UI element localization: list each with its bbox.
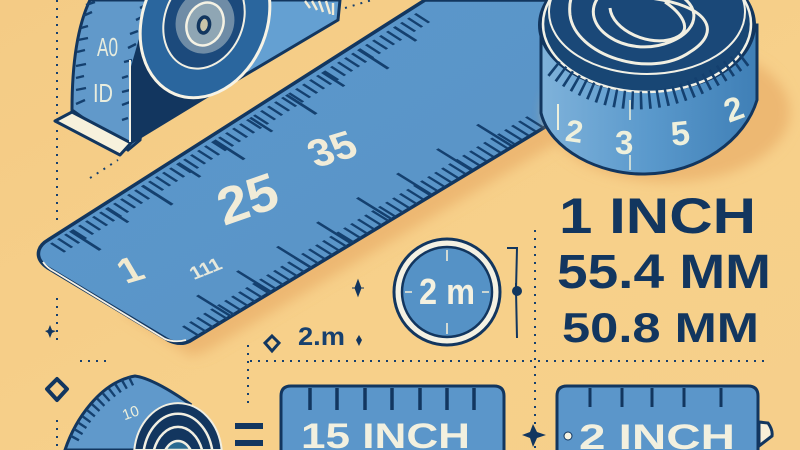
sparkle dot right of label <box>356 335 362 346</box>
bottom roll ring white inner <box>165 441 191 450</box>
right wedge <box>240 0 340 78</box>
strip ticks <box>76 2 148 120</box>
bottom roll strip <box>65 376 190 450</box>
text: 1 inch: 1 INCH <box>559 188 756 244</box>
dial ticks <box>405 250 489 334</box>
roll shadow <box>546 42 790 182</box>
dial face <box>402 247 492 337</box>
wedge ticks <box>305 1 333 15</box>
roll center marks <box>629 100 631 170</box>
bottom roll ring white outer <box>144 414 212 450</box>
roll dark band <box>549 0 745 74</box>
15 inch box <box>281 386 504 450</box>
white foot <box>55 112 131 155</box>
roll top face <box>540 0 754 91</box>
circle dial <box>394 239 500 345</box>
white strip line <box>129 60 131 142</box>
roll number 3: 3 <box>615 124 633 161</box>
box hole <box>564 432 572 440</box>
large diamond icon <box>47 379 67 400</box>
sparkle upper <box>352 280 364 296</box>
ruler body <box>38 0 560 343</box>
ruler number 25: 25 <box>210 162 285 237</box>
ruler number 35: 35 <box>300 122 364 176</box>
ruler upper ticks <box>57 15 435 253</box>
dark housing <box>131 38 210 144</box>
hub ring <box>185 1 225 47</box>
box body <box>557 386 758 450</box>
dial outer ring <box>394 239 500 345</box>
inner disc <box>176 0 234 54</box>
bottom roll rings <box>134 403 222 450</box>
roll number 2: 2 <box>563 113 585 150</box>
roll white rim <box>543 0 751 92</box>
roll number 5: 5 <box>669 114 692 154</box>
roll side <box>541 25 757 174</box>
box ticks <box>310 388 474 410</box>
ruler lower ticks <box>181 115 536 332</box>
2 inch box <box>557 386 772 450</box>
ruler shadow <box>140 128 556 357</box>
small diamond divider <box>522 424 546 447</box>
tape roll top right <box>540 0 790 182</box>
bottom roll ticks <box>74 379 135 439</box>
sparkle left <box>45 325 56 338</box>
label 2.m: 2.m <box>298 323 345 351</box>
tape roll bottom left <box>65 376 222 450</box>
roll number 2 right: 2 <box>719 88 749 129</box>
sparkle near label <box>265 336 279 351</box>
hub hole <box>197 16 211 34</box>
roll ticks <box>553 57 745 100</box>
bottom roll numbers: 10 <box>120 402 142 424</box>
dimension bracket right of dial <box>507 248 517 338</box>
box body <box>281 386 504 450</box>
outer wheel <box>138 0 272 100</box>
spiral rings <box>570 0 707 64</box>
roll numbers <box>557 97 745 170</box>
middle wheel <box>162 0 246 70</box>
tape strip <box>70 0 145 152</box>
ruler <box>38 0 560 343</box>
text: 50.8 mm: 50.8 MM <box>562 304 759 351</box>
ruler highlight edge <box>43 262 186 341</box>
roll mark 1 <box>557 104 559 130</box>
text: 55.4 mm: 55.4 MM <box>557 246 771 299</box>
ruler number 1: 1 <box>109 249 152 292</box>
ruler number 11: 111 <box>186 254 226 284</box>
box ticks <box>590 388 721 407</box>
bottom roll ring white middle <box>154 427 202 450</box>
dial label: 2 m <box>419 271 475 312</box>
tape measure top left <box>55 0 340 155</box>
dimension dot <box>512 286 522 296</box>
strip number A0: A0 <box>97 32 118 62</box>
equals sign <box>235 426 263 443</box>
box tab <box>759 422 772 446</box>
strip number ID: ID <box>93 78 113 108</box>
